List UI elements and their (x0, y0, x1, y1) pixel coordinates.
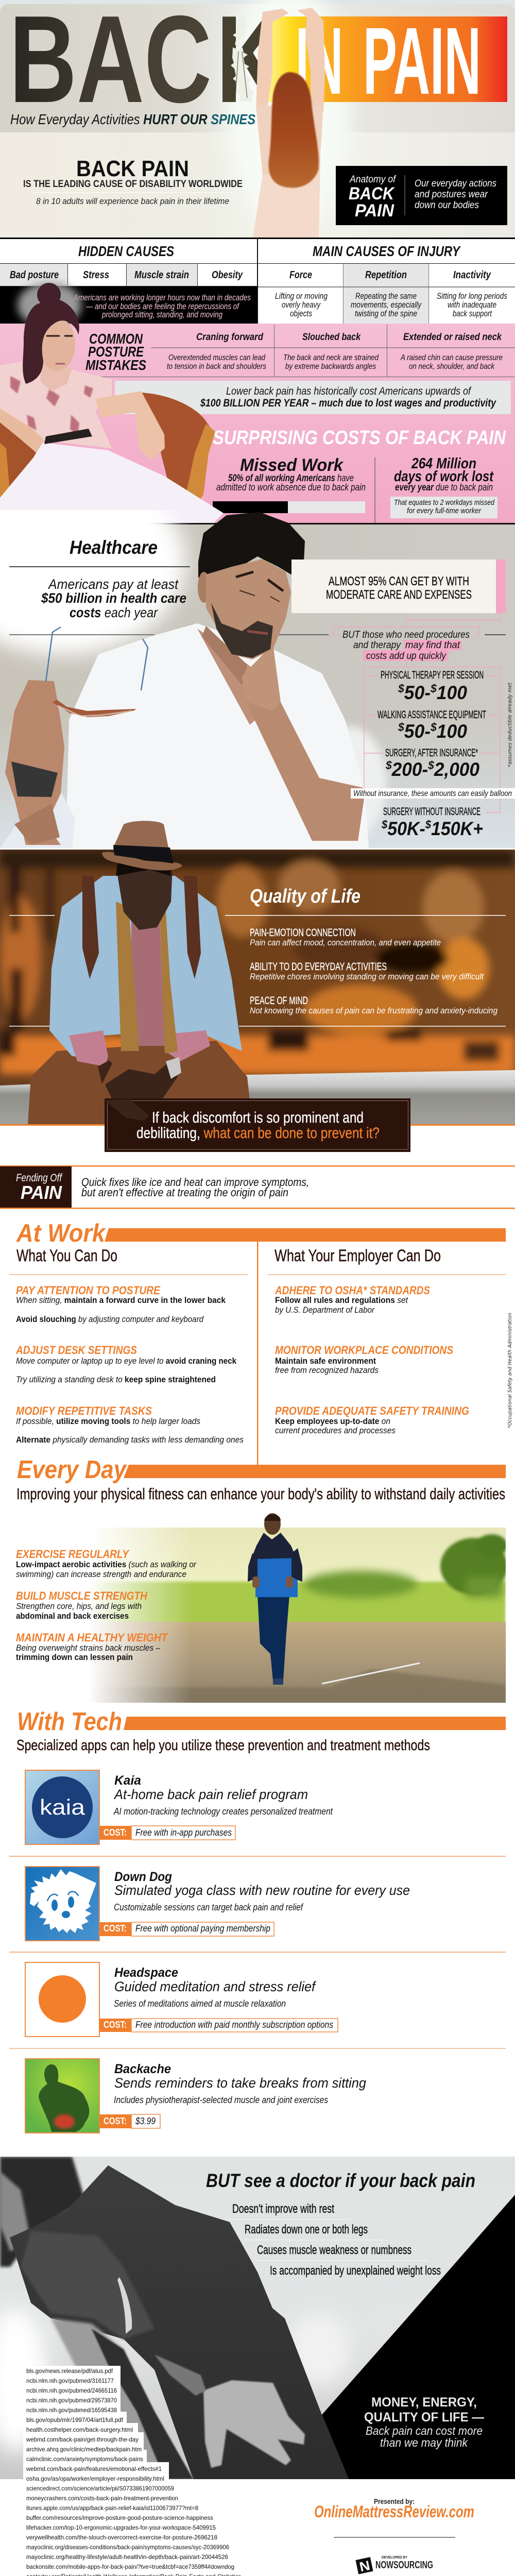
panel: sources: ncbi.nlm.nih.gov/pubmed/29573870 (26, 2397, 117, 2404)
tip: posture (16, 1284, 226, 1324)
item: pain-emotion connection: Pain can affect mood, concentration, and even appetite (250, 938, 441, 947)
tip: workplace conditions: MONITOR WORKPLACE CONDITIONS (275, 1344, 453, 1357)
panel: posture mistakes and costs (0, 282, 515, 524)
heading: at work: At Work (16, 1219, 107, 1247)
illustration: woman in chair (0, 282, 224, 523)
panel: sources: ncbi.nlm.nih.gov/pubmed/16595438 (26, 2406, 117, 2414)
cost: kaia: Free with in-app purchases (135, 1827, 232, 1838)
tip: repetitive tasks: If possible, utilize moving tools to help larger loads (16, 1416, 200, 1426)
panel: fending off pain (0, 1165, 515, 1209)
illustration: man with hat (28, 821, 252, 1124)
item: pain-emotion connection: PAIN-EMOTION CONNECTION (250, 927, 356, 939)
heading: common posture mistakes (85, 331, 146, 373)
logo: nowsourcing: DEVELOPED BY (382, 2556, 407, 2560)
panel: sources: ncbi.nlm.nih.gov/pubmed/24665116 (26, 2387, 117, 2394)
panel: sources: sciencedirect.com/science/article/pii/S0733861907000059 (26, 2485, 174, 2492)
panel: anatomy of back pain: and postures wear (415, 189, 488, 200)
panel: sources: webmd.com/back-pain/get-through-the-day (26, 2436, 139, 2443)
cost: headspace (99, 2019, 338, 2032)
tip: exercise regularly (16, 1548, 197, 1579)
panel: what your employer can do (268, 1246, 506, 1435)
tip: safety training: Keep employees up-to-date on (275, 1416, 390, 1426)
title (15, 15, 507, 103)
text: 50 billion (41, 577, 186, 620)
text: back pain stat: 8 in 10 adults will experience back pain in their lifetime (36, 196, 229, 206)
text: conclusion: Back pain can cost more (366, 2424, 483, 2437)
logo: nowsourcing: N (358, 2557, 371, 2575)
text: back pain stat: IS THE LEADING CAUSE OF DISABILITY WORLDWIDE (23, 179, 243, 190)
app: kaia: Kaia (114, 1773, 141, 1788)
shape: black corner (322, 2195, 515, 2479)
heading: at work (16, 1219, 506, 1247)
text: conclusion: QUALITY OF LIFE — (364, 2410, 484, 2425)
text: costs add up (342, 630, 470, 662)
text: force description: Lifting or moving (275, 291, 328, 301)
tip: healthy weight: MAINTAIN A HEALTHY WEIGHT (16, 1631, 168, 1644)
icon: kaia (25, 1770, 99, 1844)
credit: presented by: Presented by: (374, 2497, 415, 2505)
stat: 264 million days: for every full-time worker (407, 506, 482, 515)
list: warning signs: Doesn't improve with rest (232, 2202, 334, 2216)
heading: common posture mistakes: MISTAKES (85, 357, 146, 373)
panel: sources (23, 2358, 365, 2576)
panel: fending off pain: PAIN (21, 1182, 62, 1203)
list: treatment costs: $ (385, 759, 392, 772)
cost: backache (99, 2114, 160, 2128)
labels: hidden causes: Bad posture (10, 269, 59, 281)
cost: kaia: COST: (104, 1827, 127, 1838)
callout: prevention question (105, 1098, 410, 1152)
heading: quality of life: Quality of Life (250, 886, 360, 907)
app: backache: Sends reminders to take breaks from sitting (114, 2075, 366, 2091)
app: backache: Backache (114, 2062, 171, 2076)
tip: desk settings: Try utilizing a standing desk to keep spine straightened (16, 1375, 216, 1384)
text: force description: overly heavy (282, 300, 321, 310)
cost: backache: $3.99 (135, 2116, 156, 2126)
callout: lower back pain cost (115, 381, 511, 414)
panel: sources: backonsite.com/mobile-apps-for-back-pain/?tve=true&tcbf=ace7359ff4#downdog (26, 2563, 234, 2570)
tip: osha: Follow all rules and regulations set (275, 1295, 408, 1305)
panel: see a doctor (0, 2157, 515, 2479)
mistake: craning forward: to tension in back and shoulders (167, 362, 266, 371)
list: treatment costs: 2,000 (434, 759, 479, 780)
heading: common posture mistakes: COMMON (89, 331, 143, 347)
stat: 264 million days (390, 455, 497, 518)
item: everyday activities: ABILITY TO DO EVERYDAY ACTIVITIES (250, 961, 387, 973)
heading: healthcare: Healthcare (70, 537, 158, 558)
app: down dog (25, 1867, 410, 1941)
list: treatment costs (377, 669, 486, 780)
panel: what you can do (9, 1246, 248, 1445)
text: 50 billion: $50 billion in health care (41, 590, 186, 606)
tip: osha: by U.S. Department of Labor (275, 1305, 375, 1315)
icon: backache (25, 2059, 99, 2133)
text: inactivity description: back support (453, 309, 492, 318)
heading: see a doctor: BUT see a doctor if your back pain (206, 2170, 475, 2191)
tip: build muscle: Strengthen core, hips, and legs with (16, 1601, 142, 1611)
panel: anatomy of back pain (336, 166, 507, 225)
tip: healthy weight: Being overweight strains back muscles – (16, 1643, 160, 1653)
icon: down dog (25, 1867, 99, 1941)
callout: 95 percent: ALMOST 95% CAN GET BY WITH (329, 574, 469, 588)
stat: missed work: admitted to work absence due to back pain (216, 482, 366, 493)
labels: hidden causes (10, 269, 243, 281)
tip: desk settings: ADJUST DESK SETTINGS (15, 1344, 137, 1357)
tagline: How Everyday Activities HURT OUR SPINES (10, 111, 255, 127)
tip: healthy weight (16, 1631, 168, 1662)
panel: fending off pain: Quick fixes like ice and heat can improve symptoms, (81, 1176, 309, 1189)
tip: posture: Avoid slouching by adjusting computer and keyboard (16, 1314, 203, 1324)
tip: build muscle: abdominal and back exercises (16, 1611, 129, 1621)
note: osha definition: *Occupational Safety and Health Administration (507, 1313, 513, 1428)
icon: kaia: kaia (40, 1795, 85, 1819)
heading: common posture mistakes: POSTURE (88, 344, 144, 360)
cost: headspace: Free introduction with paid monthly subscription options (135, 2020, 333, 2030)
list: warning signs (227, 2202, 441, 2278)
panel: anatomy of back pain: BACK (349, 184, 395, 204)
callout: 95 percent (291, 560, 506, 613)
panel: anatomy of back pain: down our bodies (415, 200, 479, 211)
list: treatment costs: $ (398, 721, 404, 734)
list: treatment costs: 50- (404, 721, 431, 742)
tip: safety training: PROVIDE ADEQUATE SAFETY TRAINING (275, 1404, 469, 1417)
item: everyday activities: Repetitive chores involving standing or moving can be very difficult (250, 972, 484, 981)
illustration: runner (248, 1513, 302, 1685)
tip: workplace conditions: Maintain safe environment (275, 1356, 376, 1366)
text: back pain stat: BACK PAIN (76, 156, 189, 181)
connector lines (333, 613, 500, 812)
labels: hidden causes: Stress (83, 269, 109, 281)
app: headspace (25, 1962, 338, 2037)
cost: down dog (99, 1922, 274, 1936)
item: everyday activities (250, 961, 484, 981)
labels: main causes (289, 269, 491, 281)
list: treatment costs: 50- (404, 682, 431, 703)
panel: sources: calmclinic.com/anxiety/symptoms/back-pains (26, 2455, 143, 2463)
item: pain-emotion connection (250, 927, 441, 947)
cost: kaia (99, 1826, 235, 1840)
text: working longer hours: prolonged sitting, standing, and moving (101, 310, 222, 319)
tip: build muscle (16, 1589, 148, 1621)
app: backache: Includes physiotherapist-selected muscle and joint exercises (114, 2095, 328, 2105)
text: inactivity description (437, 291, 507, 318)
illustration: woman stretching (253, 8, 325, 238)
illustration: man holding back (0, 2157, 349, 2479)
app: down dog: Simulated yoga class with new routine for every use (114, 1883, 410, 1898)
text: costs add up: BUT those who need procedures (342, 630, 470, 640)
panel: sources: bls.gov/news.release/pdf/atus.pdf (26, 2367, 113, 2375)
text: conclusion: MONEY, ENERGY, (371, 2395, 477, 2410)
item: peace of mind: PEACE OF MIND (250, 995, 308, 1007)
heading: main causes of injury: MAIN CAUSES OF INJURY (313, 243, 461, 259)
tip: repetitive tasks: MODIFY REPETITIVE TASKS (16, 1404, 152, 1417)
panel: fending off pain: but aren't effective at treating the origin of pain (81, 1186, 288, 1199)
text: repetition description: movements, especially (351, 300, 422, 310)
list: warning signs: Causes muscle weakness or numbness (257, 2243, 411, 2257)
tip: build muscle: BUILD MUSCLE STRENGTH (16, 1589, 148, 1602)
tip: exercise regularly: swimming) can increase strength and endurance (16, 1569, 186, 1579)
text: working longer hours (73, 293, 251, 319)
illustration: man with neck pain (0, 512, 369, 848)
panel: sources: mayoclinic.org/healthy-lifestyle/adult-health/in-depth/back-pain/art-20044526 (26, 2553, 228, 2561)
mistake: slouched back: Slouched back (302, 332, 361, 343)
mistake: craning forward: Overextended muscles can lead (168, 353, 266, 362)
tip: workplace conditions (275, 1344, 453, 1375)
text: surgery without insurance: 50K- (387, 818, 425, 839)
panel: sources: buffer.com/resources/improve-posture-good-posture-science-happiness (26, 2514, 213, 2521)
panel: sources: itunes.apple.com/us/app/back-pain-relief-kaia/id1100673977?mt=8 (26, 2504, 198, 2512)
tip: repetitive tasks: Alternate physically demanding tasks with less demanding ones (16, 1435, 244, 1445)
stat: 264 million days: 264 Million (411, 455, 476, 472)
text: surgery without insurance: $ (425, 818, 432, 831)
icon: spine (231, 17, 254, 101)
text: 50 billion: costs each year (70, 605, 158, 620)
app: down dog: Customizable sessions can target back pain and relief (114, 1902, 304, 1912)
text: working longer hours: Americans are working longer hours now than in decades (73, 293, 251, 302)
heading: with tech: With Tech (17, 1708, 122, 1736)
labels: main causes: Repetition (365, 269, 407, 281)
panel: sources: lifehacker.com/top-10-ergonomic-upgrades-for-your-workspace-5409915 (26, 2524, 216, 2531)
mistake: slouched back: The back and neck are strained (283, 353, 379, 362)
panel: sources: verywellhealth.com/the-slouch-overcorrect-exercise-for-posture-2696218 (26, 2534, 217, 2541)
callout: lower back pain cost: Lower back pain has historically cost Americans upwards of (226, 385, 472, 397)
tip: desk settings (15, 1344, 236, 1384)
labels: hidden causes: Obesity (212, 269, 243, 281)
cost: down dog: Free with optional paying membership (135, 1923, 270, 1934)
list: treatment costs: 100 (437, 682, 467, 703)
panel: fending off pain: Fending Off (16, 1172, 63, 1184)
stat: missed work (213, 455, 366, 513)
tip: posture: PAY ATTENTION TO POSTURE (16, 1284, 161, 1297)
text: costs add up: may find that (405, 640, 460, 651)
panel: healthcare (0, 510, 515, 848)
text: costs add up: and therapy (353, 640, 401, 651)
logo: nowsourcing (355, 2556, 433, 2575)
app: headspace: Series of meditations aimed at muscle relaxation (114, 1998, 286, 2009)
text: repetition description (351, 291, 422, 318)
panel: sources: archive.ahrq.gov/clinic/medtep/backpain.htm (26, 2446, 142, 2453)
list: treatment costs: $ (430, 721, 437, 734)
tip: osha: ADHERE TO OSHA* STANDARDS (274, 1284, 430, 1297)
list: treatment costs: $ (398, 682, 404, 695)
tip: posture: When sitting, maintain a forward curve in the lower back (16, 1295, 226, 1305)
heading: hidden causes: HIDDEN CAUSES (78, 243, 174, 259)
stat: missed work: 50% of all working Americans have (228, 473, 354, 484)
list: treatment costs: 200- (391, 759, 428, 780)
tip: exercise regularly: Low-impact aerobic activities (such as walking or (16, 1560, 197, 1569)
panel: hero (0, 0, 515, 238)
panel: causes table (0, 238, 515, 325)
mistake: craning forward (167, 332, 266, 371)
tip: osha (274, 1284, 430, 1315)
bar chart: 50 percent (213, 501, 365, 513)
text: surgery without insurance: 150K+ (431, 818, 483, 839)
callout: prevention question: If back discomfort is so prominent and (152, 1109, 364, 1126)
title: IN (296, 8, 343, 114)
app: headspace: Headspace (114, 1965, 178, 1980)
panel: sources: Sources: (26, 2358, 48, 2365)
mistake: extended neck (400, 332, 503, 371)
panel: sources: ncbi.nlm.nih.gov/pubmed/3161177 (26, 2377, 114, 2384)
app: kaia (25, 1770, 333, 1844)
text: surgery without insurance (381, 807, 483, 836)
text: surgery without insurance: $ (381, 818, 388, 831)
text: force description (275, 291, 328, 318)
list: warning signs: Is accompanied by unexplained weight loss (270, 2264, 441, 2278)
credit: presented by (314, 2497, 474, 2538)
item: peace of mind (250, 995, 497, 1015)
panel: sources: health.costhelper.com/back-surgery.html (26, 2426, 133, 2433)
tip: safety training: current procedures and processes (275, 1426, 396, 1435)
logo: nowsourcing: NOWSOURCING (375, 2560, 433, 2571)
labels: main causes: Force (289, 269, 312, 281)
text: working longer hours: — and our bodies are feeling the repercussions of (85, 301, 240, 311)
text: repetition description: Repeating the same (355, 291, 417, 301)
panel: anatomy of back pain: PAIN (355, 201, 394, 221)
tip: workplace conditions: free from recognized hazards (275, 1365, 379, 1375)
labels: hidden causes: Muscle strain (134, 269, 189, 281)
panel: sources: mayoclinic.org/diseases-conditions/back-pain/symptoms-causes/syc-20369906 (26, 2544, 229, 2551)
heading: with tech (17, 1708, 506, 1736)
text: conclusion: than we may think (380, 2436, 468, 2449)
list: treatment costs: $ (430, 682, 437, 695)
text: back pain stat (23, 156, 243, 206)
app: down dog: Down Dog (114, 1870, 172, 1884)
text: repetition description: twisting of the spine (355, 309, 417, 318)
labels: main causes: Inactivity (453, 269, 491, 281)
tip: safety training (275, 1404, 469, 1435)
mistake: craning forward: Craning forward (196, 332, 263, 343)
panel: runner scene (16, 1513, 507, 1703)
cost: backache: COST: (104, 2116, 127, 2126)
panel: anatomy of back pain: Our everyday actions (415, 178, 496, 189)
cost: down dog: COST: (104, 1923, 127, 1934)
list: warning signs: Radiates down one or both legs (245, 2223, 368, 2236)
text: force description: objects (290, 309, 312, 318)
panel: what you can do: What You Can Do (16, 1246, 117, 1265)
list: treatment costs: 100 (437, 721, 467, 742)
heading: every day: Every Day (17, 1456, 127, 1484)
text: inactivity description: with inadequate (448, 300, 496, 310)
app: kaia: At-home back pain relief program (113, 1787, 308, 1802)
app: headspace: Guided meditation and stress relief (114, 1979, 316, 1994)
mistake: extended neck: on neck, shoulder, and back (409, 362, 495, 371)
tip: repetitive tasks (16, 1404, 244, 1445)
heading: every day (17, 1456, 506, 1484)
icon: headspace (25, 1962, 99, 2037)
app: kaia: AI motion-tracking technology creates personalized treatment (113, 1806, 333, 1817)
mistake: slouched back (283, 332, 379, 371)
panel: anatomy of back pain: Anatomy of (349, 174, 397, 185)
text: 50 billion: Americans pay at least (47, 577, 179, 592)
app: backache (25, 2059, 366, 2133)
stat: 264 million days: days of work lost (394, 468, 494, 485)
text: conclusion (364, 2395, 484, 2449)
panel: sources: bls.gov/opub/mlr/1997/04/art1full.pdf (26, 2416, 124, 2424)
panel: quality of life (0, 821, 515, 1124)
panel: what your employer can do: What Your Employer Can Do (274, 1246, 441, 1265)
stat: 264 million days: That equates to 2 workdays missed (394, 498, 495, 507)
callout: prevention question: debilitating, what can be done to prevent it? (136, 1125, 380, 1142)
tip: desk settings: Move computer or laptop up to eye level to avoid craning neck (16, 1356, 236, 1366)
list: treatment costs: $ (427, 759, 435, 772)
stat: missed work: Missed Work (240, 455, 344, 475)
stat: 264 million days: every year due to back pain (395, 482, 493, 493)
tip: healthy weight: trimming down can lessen pain (16, 1652, 133, 1662)
panel: sources: webmd.com/back-pain/features/emotional-effects#1 (26, 2465, 162, 2472)
mistake: slouched back: by extreme backwards angles (285, 362, 376, 371)
panel: sources: moneycrashers.com/costs-back-pain-treatment-prevention (26, 2495, 178, 2502)
mistake: extended neck: Extended or raised neck (403, 332, 502, 343)
text: costs add up: costs add up quickly (366, 651, 447, 662)
tip: exercise regularly: EXERCISE REGULARLY (16, 1548, 130, 1561)
panel: sources: osha.gov/as/opa/worker/employer-responsibility.html (26, 2475, 164, 2482)
cost: headspace: COST: (104, 2020, 127, 2030)
note: deductible: *assumes deductible already met (507, 682, 513, 767)
